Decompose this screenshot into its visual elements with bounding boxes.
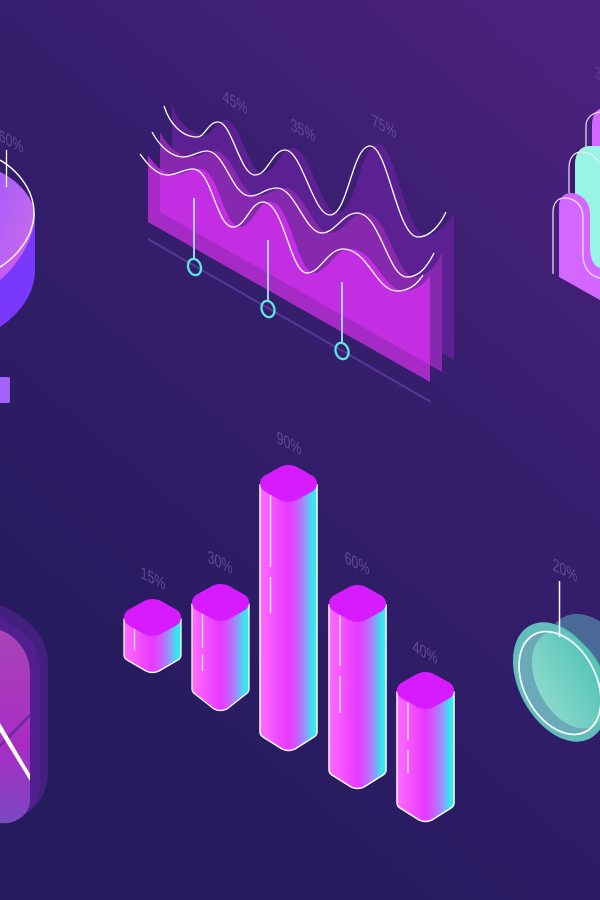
back layer: [0, 605, 48, 820]
back arch: [592, 109, 600, 200]
label 90%: 90%: [277, 428, 301, 460]
pie cylinder, left edge: [0, 126, 35, 403]
label 30%: 30%: [208, 547, 232, 579]
label 75%: 75%: [372, 111, 396, 143]
baseline: [148, 239, 431, 402]
pin 1: [186, 198, 203, 277]
label 35%: 35%: [291, 115, 315, 147]
front arch: [559, 193, 600, 300]
label 15%: 15%: [141, 563, 165, 595]
outer disc: [494, 606, 600, 758]
area: front layer overlap: [160, 169, 430, 365]
coin chart, bottom right: [494, 555, 600, 758]
pointer line: [6, 150, 8, 187]
pointer line: [558, 581, 560, 637]
white ring: [0, 160, 34, 267]
pin 2: [259, 240, 277, 319]
cylinder side: [0, 214, 35, 327]
middle layer: [0, 618, 40, 822]
area: middle layer: [160, 132, 442, 372]
highlight disc: [516, 619, 600, 741]
label 40%: 40%: [413, 637, 437, 669]
area: front layer: [147, 154, 430, 382]
bar 60%: [329, 585, 386, 788]
wave lines: [140, 106, 446, 291]
bar 90%: [260, 465, 317, 750]
bar 15%: [124, 599, 181, 672]
arch chart, top right: [553, 63, 600, 300]
dark band: [569, 146, 600, 220]
top face: [0, 172, 34, 267]
legend square: [0, 377, 10, 403]
rounded panel, bottom left: [0, 605, 48, 823]
area: back layer: [172, 104, 454, 360]
inner shade: [502, 618, 600, 748]
label 60%: 60%: [345, 548, 369, 580]
dark diagonal line: [0, 715, 30, 746]
wave area chart: [140, 87, 454, 402]
mint arch: [575, 146, 600, 275]
white outlines: [553, 112, 600, 278]
pin 3: [333, 282, 351, 361]
back disc: [527, 598, 600, 746]
label 45%: 45%: [223, 87, 247, 119]
bar 30%: [192, 584, 249, 710]
bar 40%: [397, 672, 454, 822]
white ring: [502, 618, 600, 748]
bar chart: [124, 428, 454, 822]
front panel: [0, 630, 30, 823]
label 20%: 20%: [553, 555, 577, 587]
white diagonal line: [0, 723, 30, 781]
rim: [0, 172, 35, 280]
